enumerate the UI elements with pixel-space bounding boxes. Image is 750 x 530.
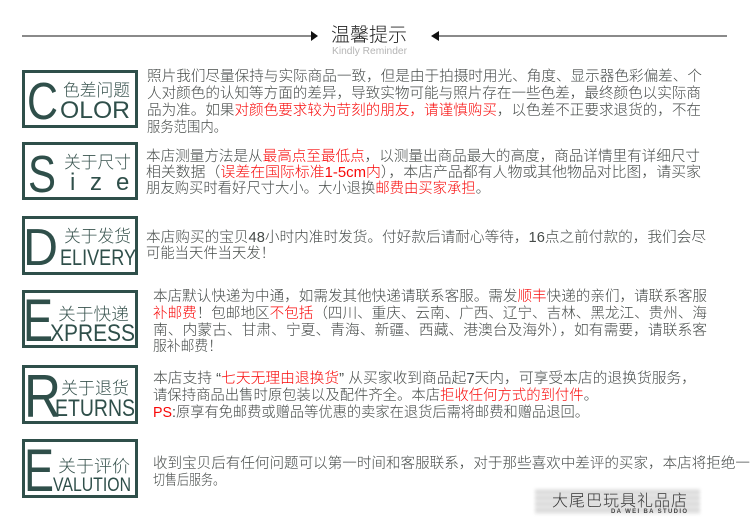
text block: color: 品为准。如果对颜色要求较为苛刻的朋友，请谨慎购买，以色差不正要求退货的，不在	[147, 99, 701, 120]
panel: color	[24, 65, 702, 136]
icon: returns badge: ETURNS	[55, 395, 135, 422]
text block: express: 补邮费！包邮地区不包括（四川、重庆、云南、广西、辽宁、吉林、黑龙江、贵州、海	[153, 302, 707, 323]
icon: color badge	[24, 72, 136, 131]
logo: studio stamp	[535, 489, 700, 515]
icon: express badge	[23, 287, 136, 354]
text block: returns: 本店支持 “七天无理由退换货” 从买家收到商品起7天内，可享受本店的退换货服务，	[153, 367, 696, 388]
icon: express badge: 关于快递	[58, 305, 129, 324]
text block: express	[153, 285, 707, 356]
text block: express: 本店默认快递为中通，如需发其他快递请联系客服。需发顺丰快递的亲们，请联系客服	[153, 285, 707, 306]
icon: color badge: OLOR	[60, 97, 130, 124]
icon: express badge: E	[23, 287, 53, 354]
icon: returns badge	[24, 363, 136, 430]
icon: evaluation badge: 关于评价	[58, 457, 130, 476]
panel: delivery	[23, 218, 706, 277]
icon: evaluation badge	[24, 437, 136, 504]
text block: evaluation: 收到宝贝后有任何问题可以第一时间和客服联系，对于那些喜欢中差评的买家，本店将拒绝一	[153, 452, 750, 473]
icon: size badge: S	[28, 146, 56, 204]
icon: color badge: 色差问题	[63, 81, 130, 100]
icon: size badge: z	[90, 169, 102, 196]
text block: color: 照片我们尽量保持与实际商品一致，但是由于拍摄时用光、角度、显示器色彩偏差、个	[147, 65, 702, 86]
icon: size badge: 关于尺寸	[64, 153, 131, 172]
title block	[22, 24, 727, 57]
text block: color	[147, 65, 702, 136]
heading: 温馨提示	[331, 24, 407, 46]
panel: express	[23, 285, 707, 356]
right divider with arrow	[431, 31, 727, 41]
icon: size badge	[24, 144, 136, 204]
icon: evaluation badge: VALUTION	[53, 475, 131, 496]
panel: returns	[24, 363, 696, 430]
icon: size badge: e	[116, 169, 129, 196]
icon: delivery badge: ELIVERY	[60, 245, 136, 270]
text block: size: 本店测量方法是从最高点至最低点，以测量出商品最大的高度，商品详情里有详细尺寸	[146, 145, 700, 166]
icon: size badge: i	[70, 169, 75, 196]
icon: delivery badge: D	[23, 219, 58, 277]
panel: evaluation	[24, 437, 750, 504]
left divider with arrow	[22, 31, 318, 41]
text block: express: 服补邮费！	[153, 335, 222, 356]
icon: returns badge: R	[24, 363, 61, 430]
text block: evaluation: 切售后服务。	[153, 472, 225, 489]
text block: evaluation	[153, 452, 750, 489]
logo: studio stamp: DA WEI BA STUDIO	[611, 509, 687, 515]
text block: color: 人对颜色的认知等方面的差异，导致实物可能与照片存在一些色差，最终颜色以实际商	[147, 82, 701, 103]
logo: studio stamp: 大尾巴玩具礼品店	[552, 492, 687, 510]
text block: returns: 请保持商品出售时原包装以及配件齐全。本店拒收任何方式的到付件。	[153, 387, 598, 404]
text block: size: 相关数据（误差在国际标准1-5cm内 ），本店产品都有人物或其他物品对比图 ，请买家	[146, 161, 701, 182]
panel: size	[24, 144, 701, 204]
text block: color: 服务范围内。	[147, 119, 227, 136]
text block: delivery	[146, 226, 706, 263]
text block: returns	[153, 367, 696, 421]
text block: size	[146, 145, 701, 197]
icon: delivery badge	[23, 218, 136, 277]
text block: returns: PS:原享有免邮费或赠品等优惠的卖家在退货后需将邮费和赠品退回。	[153, 404, 589, 421]
icon: express badge: XPRESS	[50, 320, 135, 347]
icon: delivery badge: 关于发货	[64, 227, 131, 246]
subtitle: Kindly Reminder	[332, 45, 407, 57]
text block: express: 南、内蒙古、甘肃、宁夏、青海、新疆、西藏、港澳台及海外 ），如有需要，请联系客	[153, 319, 707, 340]
icon: returns badge: 关于退货	[61, 379, 129, 398]
icon: evaluation badge: E	[24, 437, 54, 504]
text block: delivery: 本店购买的宝贝48小时内准时发货。付好款后请耐心等待 ，16点之前付款的，我们会尽	[146, 226, 706, 247]
icon: color badge: C	[27, 73, 58, 131]
text block: size: 朋友购买时看好尺寸大小。大小退换邮费由买家承担。	[146, 180, 490, 197]
text block: delivery: 可能当天件当天发！	[146, 242, 275, 263]
